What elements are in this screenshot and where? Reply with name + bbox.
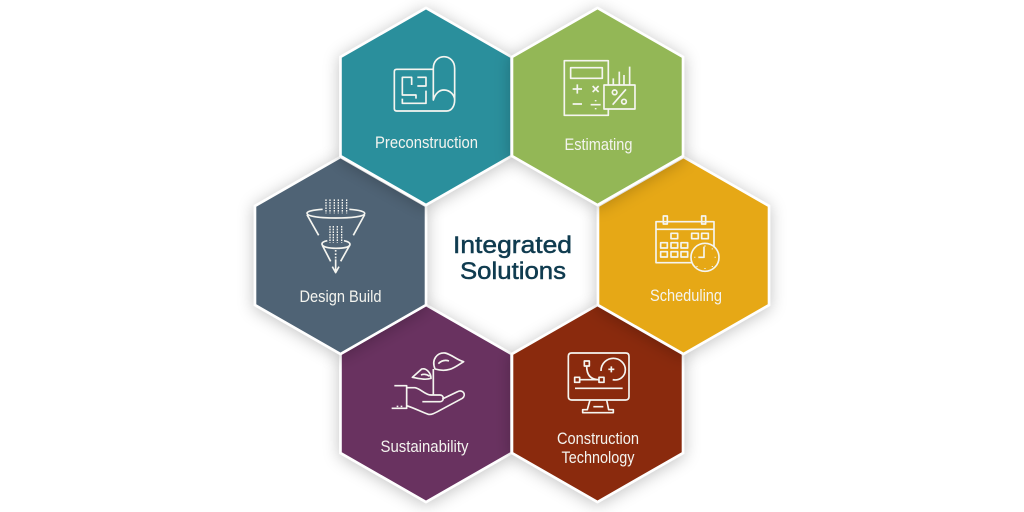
panel: scheduling — [598, 157, 769, 354]
label: Preconstruction: Preconstruction — [375, 134, 478, 152]
title — [453, 232, 572, 285]
hexagon: design build — [255, 157, 426, 354]
label: Sustainability: Sustainability — [380, 438, 469, 456]
panel: preconstruction — [340, 8, 512, 205]
panel: sustainability — [340, 305, 512, 502]
label: second line: Technology — [562, 449, 635, 467]
hexagon: estimating — [512, 8, 683, 205]
title line 1: Integrated — [453, 232, 572, 259]
icon: blueprint roll — [394, 57, 455, 111]
icon: funnels — [307, 199, 365, 273]
hexagon: sustainability — [340, 305, 512, 502]
label: Construction Technology: Construction — [557, 430, 639, 448]
hexagon: construction technology — [512, 305, 683, 502]
label: Scheduling: Scheduling — [650, 287, 722, 305]
title line 2: Solutions — [460, 258, 566, 285]
hexagon: scheduling — [598, 157, 769, 354]
panel: construction technology — [512, 305, 683, 502]
hexagon: preconstruction — [340, 8, 512, 205]
label: Estimating: Estimating — [564, 136, 632, 154]
panel: estimating — [512, 8, 683, 205]
icon: calendar with clock — [656, 216, 719, 271]
icon: calculator with percent — [564, 61, 635, 115]
label: Design Build: Design Build — [300, 288, 382, 306]
icon: monitor with design nodes — [568, 353, 629, 413]
icon: hand holding seedling — [392, 353, 464, 414]
panel: design build — [255, 157, 426, 354]
